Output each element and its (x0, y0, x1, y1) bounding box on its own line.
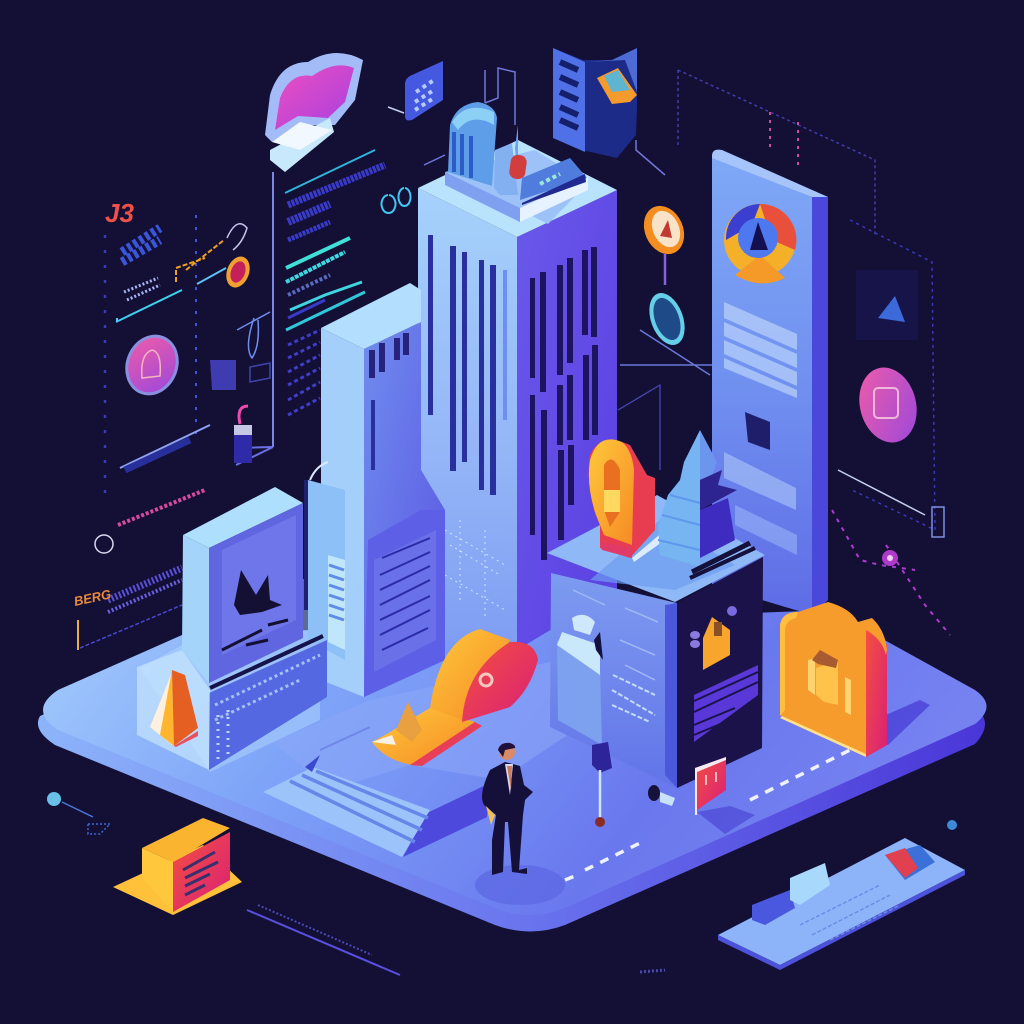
icon: yellow red capsule (589, 439, 665, 562)
dashed path (565, 750, 850, 880)
front left block (137, 487, 327, 770)
tower left windows (428, 235, 507, 495)
box orange lock (703, 617, 730, 670)
bottom-right card (718, 820, 965, 970)
icon: orange slide (372, 629, 538, 766)
panel: lower left data lines (78, 490, 205, 650)
lamp post (592, 742, 612, 827)
pink sign (695, 757, 755, 834)
icon: chat card (388, 61, 443, 120)
left small pin (47, 792, 110, 834)
bottom line chart (247, 905, 665, 975)
steps (263, 727, 490, 857)
icon: cloud (265, 53, 363, 172)
rooftop base (445, 150, 588, 224)
panel: right circuit screen (618, 70, 950, 635)
rooftop blue device (448, 102, 497, 186)
rooftop screen (520, 158, 587, 200)
text: red glyphs: J3 (105, 198, 134, 228)
text: orange label: BERG (73, 586, 112, 609)
icon: orange coin (636, 199, 692, 285)
bottom-left orange box (113, 818, 242, 915)
icon: orange small coin (222, 253, 254, 291)
icon: teal coin (643, 288, 691, 350)
icon: big orange tag (780, 602, 887, 757)
icon: gold blue logo (724, 204, 796, 283)
block base (209, 640, 327, 770)
icon: pink coin (852, 361, 924, 449)
tower right windows (530, 247, 598, 560)
rooftop red capsule (508, 154, 528, 180)
icon: orange cone (150, 670, 198, 747)
icon: small lock on left screen (234, 406, 252, 463)
icon: server panel (553, 48, 637, 158)
small dark knob (648, 785, 675, 806)
panel: left code lines (285, 150, 411, 415)
man figure (482, 743, 533, 875)
middle building (306, 283, 445, 697)
box text lines (694, 665, 758, 742)
panel: left circuit screen (105, 172, 273, 500)
wires above tower (424, 68, 665, 175)
icon: left pink badge (116, 327, 188, 403)
icon: spire (658, 430, 750, 572)
tall panel (712, 150, 828, 615)
central box (547, 495, 765, 788)
main tower (418, 102, 617, 650)
box windows (557, 640, 602, 745)
platform (38, 570, 986, 932)
